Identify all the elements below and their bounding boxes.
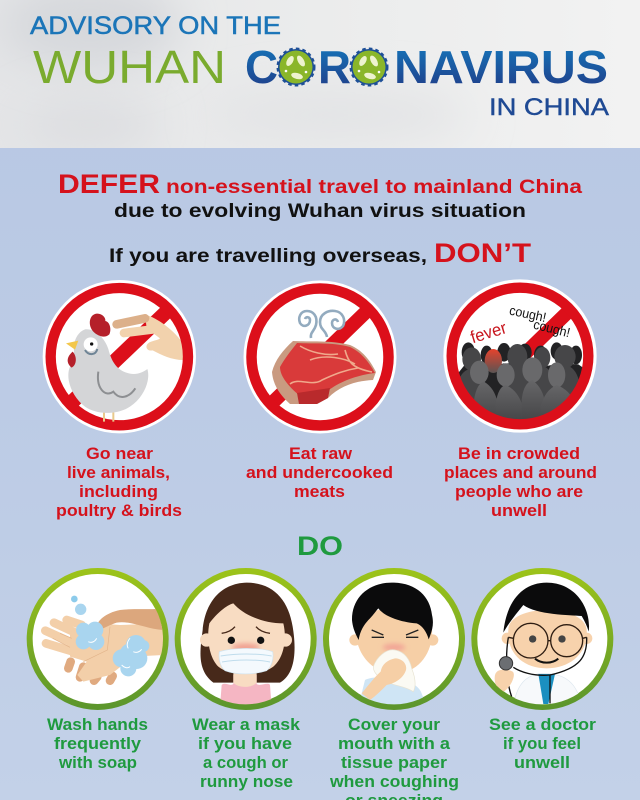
label: go near live animals (56, 445, 182, 520)
icon: virus one (278, 49, 314, 85)
meat steak (272, 341, 376, 404)
label: cover your mouth: mouth with a (338, 735, 451, 753)
heading word: Wuhan: WUHAN (33, 41, 226, 93)
label: cover your mouth (329, 716, 459, 800)
glasses (508, 623, 587, 658)
label: crowded places (444, 445, 597, 520)
label: cover your mouth: tissue paper (341, 754, 448, 772)
hand (117, 314, 183, 360)
label: wash hands (47, 716, 148, 772)
label: crowded places: unwell (491, 502, 547, 520)
label: wash hands: Wash hands (47, 716, 148, 734)
label: see a doctor: See a doctor (489, 716, 597, 734)
label: wear a mask: if you have (198, 735, 292, 753)
hand and arm (362, 658, 406, 700)
label: go near live animals: Go near (86, 445, 154, 463)
label: wear a mask: runny nose (200, 773, 293, 791)
do heading: DO (297, 531, 343, 561)
label: crowded places: people who are (455, 483, 583, 501)
icon: wash hands (30, 571, 166, 707)
label: crowded places: Be in crowded (458, 445, 580, 463)
heading word: coronavirus with virus icons: R (318, 41, 351, 93)
heading line: advisory on the: ADVISORY ON THE (30, 12, 281, 40)
label: wear a mask: a cough or (203, 754, 289, 772)
hands (70, 623, 163, 682)
icon: cover your mouth (326, 571, 462, 707)
fever text: fever (468, 317, 509, 347)
icon: virus two (351, 49, 387, 85)
label: wear a mask: Wear a mask (192, 716, 301, 734)
heading word: coronavirus with virus icons: NAVIRUS (394, 41, 608, 93)
label: cover your mouth: when coughing (329, 773, 459, 791)
label: go near live animals: poultry & birds (56, 502, 182, 520)
defer word: DEFER (58, 169, 160, 199)
label: eat raw meats: Eat raw (289, 445, 352, 463)
label: crowded places: places and around (444, 464, 597, 482)
don't heading (109, 238, 532, 268)
stethoscope (507, 637, 587, 703)
label: wash hands: frequently (54, 735, 142, 753)
icon: see a doctor (474, 571, 610, 707)
don't heading: If you are travelling overseas, (109, 245, 427, 267)
label: see a doctor: if you feel (503, 735, 581, 753)
label: go near live animals: including (79, 483, 158, 501)
face mask (219, 648, 273, 674)
heading word: coronavirus with virus icons (246, 48, 606, 86)
icon: no live animals (43, 280, 196, 433)
label: eat raw meats: meats (294, 483, 345, 501)
lower hand fingers (45, 620, 113, 681)
chicken (66, 314, 148, 422)
icon: no raw meat (244, 280, 396, 434)
situation line: due to evolving Wuhan virus situation (114, 201, 526, 222)
don't heading: DON’T (434, 238, 532, 268)
header banner (0, 0, 640, 150)
cough text one: cough! (508, 303, 548, 325)
label: go near live animals: live animals, (67, 464, 170, 482)
icon: no crowds (443, 279, 597, 433)
cough text two: cough! (532, 317, 572, 340)
label: wear a mask (192, 716, 301, 791)
label: cover your mouth: Cover your (348, 716, 441, 734)
soap bubbles (75, 604, 86, 615)
soap foam right (113, 635, 149, 676)
label: see a doctor (489, 716, 597, 772)
label: eat raw meats (246, 445, 393, 501)
label: wash hands: with soap (58, 754, 137, 772)
label: see a doctor: unwell (514, 754, 570, 772)
stink swirls (299, 311, 344, 338)
icon: wear a mask (178, 571, 314, 707)
heading line: in China: IN CHINA (489, 94, 609, 121)
soap foam left (76, 622, 104, 650)
advisory text (58, 169, 582, 222)
heading word: coronavirus with virus icons: C (245, 41, 278, 93)
crowd silhouettes (459, 342, 582, 420)
label: eat raw meats: and undercooked (246, 464, 393, 482)
defer sentence: non-essential travel to mainland China (166, 176, 582, 198)
tissue (373, 650, 415, 692)
